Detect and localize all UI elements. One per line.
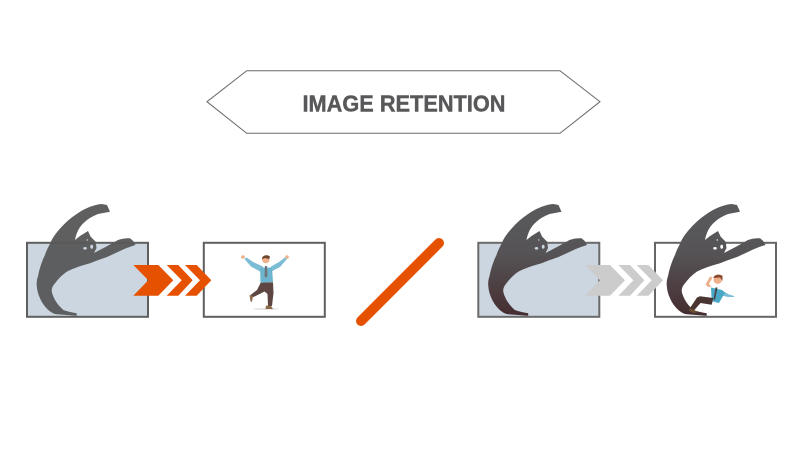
slash divider xyxy=(361,243,439,321)
icon: scared person xyxy=(689,275,734,313)
arrows: orange chevrons xyxy=(133,265,211,296)
shadow eyes xyxy=(83,239,93,250)
shadow eyes xyxy=(535,239,545,250)
icon: happy person xyxy=(241,255,289,310)
shadow figure xyxy=(488,204,587,316)
arrows: grey chevrons xyxy=(585,265,663,296)
panel: white screen with shadow chasing person xyxy=(655,204,776,317)
title banner xyxy=(207,71,600,133)
shadow figure xyxy=(667,204,766,316)
shadow figure xyxy=(37,204,136,316)
panel: white screen with dancing person xyxy=(204,243,325,317)
shadow eyes xyxy=(713,239,723,250)
panel: blue screen with shadow xyxy=(27,204,148,317)
title text: IMAGE RETENTION xyxy=(302,90,506,116)
panel: blue screen with dark shadow xyxy=(478,204,599,317)
